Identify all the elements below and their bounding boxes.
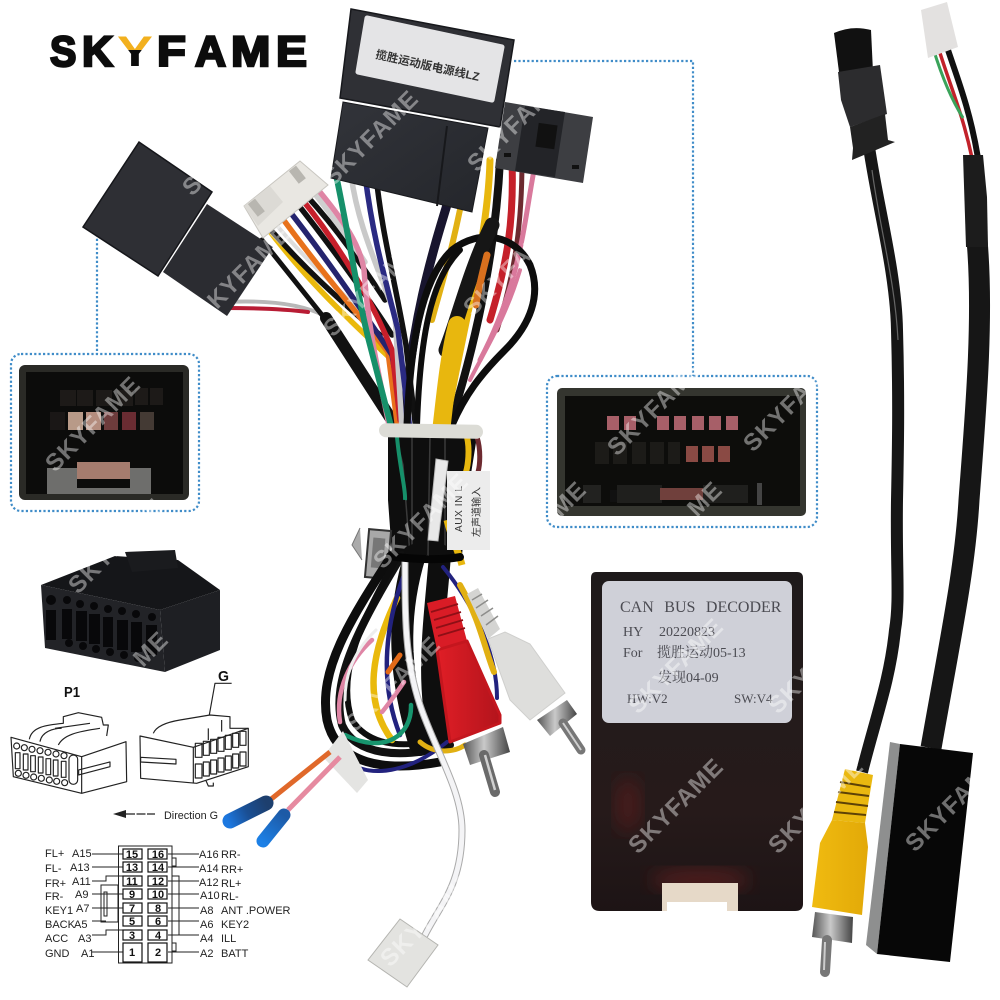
small white terminal [368, 919, 438, 987]
pinout diagram [45, 846, 291, 963]
SKYFAME watermarks: SKYFAME [318, 236, 424, 342]
lower wire loops [325, 555, 465, 771]
pin numbers: 16 [152, 849, 164, 861]
pin labels left: FR+ [45, 878, 66, 890]
pin numbers [126, 849, 165, 959]
pin labels right: ANT .POWER [221, 905, 291, 917]
black inline module [866, 742, 973, 962]
pin labels left: A7 [76, 903, 89, 915]
pin labels right: BATT [221, 948, 249, 960]
heat-shrink tube [428, 459, 448, 541]
pin labels left: A1 [81, 948, 94, 960]
pin labels right [199, 849, 291, 960]
pin numbers: 11 [126, 876, 138, 888]
callout leader: main connector to inset [514, 61, 693, 376]
SKYFAME watermarks: SKYFAME [623, 753, 729, 859]
SKYFAME watermarks: ME [128, 626, 174, 672]
pin labels left [45, 848, 94, 960]
blue tip 2 [263, 815, 284, 841]
pin labels left: A15 [72, 848, 92, 860]
SKYFAME watermarks: SKYFAME [458, 215, 564, 321]
logo: SKYFAME: K [82, 28, 113, 76]
decoder label text: HW:V2 [627, 691, 668, 706]
round plug [834, 28, 873, 72]
pin labels left: FL- [45, 863, 62, 875]
callout leader: left connector to inset [96, 230, 98, 354]
left double connector [83, 142, 273, 316]
pin numbers: 5 [129, 916, 135, 928]
pin labels left: GND [45, 948, 70, 960]
SKYFAME watermarks: SKYFAME [318, 85, 424, 191]
pin numbers: 4 [155, 930, 162, 942]
AUX label tag: 左声道输入 [470, 487, 483, 537]
pin numbers: 15 [126, 849, 138, 861]
pin labels right: A2 [200, 948, 213, 960]
decoder port [662, 883, 738, 912]
SKYFAME watermarks: SKYFAME [368, 468, 474, 574]
SKYFAME watermarks: SKYFAME [602, 355, 708, 461]
pin labels right: KEY2 [221, 919, 249, 931]
decoder label text [620, 599, 782, 706]
SKYFAME watermarks: SKYFAME [177, 95, 283, 201]
pin numbers: 8 [155, 903, 161, 915]
connector label text: 揽胜运动版电源线LZ [374, 47, 481, 84]
pin labels right: A8 [200, 905, 213, 917]
decoder label text: 揽胜运动05-13 [657, 644, 746, 661]
pin numbers: 14 [152, 862, 165, 874]
SKYFAME watermarks: ME [546, 476, 592, 522]
pinout frame [92, 846, 199, 963]
decoder label text: HY [623, 625, 643, 640]
decoder label text: SW:V4 [734, 691, 773, 706]
pin labels left: FR- [45, 891, 64, 903]
logo: SKYFAME: Y [117, 28, 153, 76]
pin labels right: A4 [200, 933, 213, 945]
camera cable: thick with white terminal [921, 2, 988, 748]
decoder label [602, 581, 792, 723]
CAN bus decoder box [591, 572, 803, 912]
pin labels right: A6 [200, 919, 213, 931]
pin labels left: A9 [75, 889, 88, 901]
pin labels left: KEY1 [45, 905, 73, 917]
SKYFAME watermarks: SKYFAME [763, 613, 869, 719]
white two-wire cable with terminal [368, 560, 462, 987]
direction label: Direction G [164, 810, 218, 822]
pin labels left: A3 [78, 933, 91, 945]
cable tie: white [379, 423, 483, 439]
pin numbers: 10 [152, 889, 164, 901]
orange and pink leads with blue tips [230, 731, 368, 841]
right inset photo panel [547, 376, 817, 527]
left inset photo panel [11, 354, 199, 511]
decoder label text: CAN BUS DECODER [620, 599, 782, 616]
SKYFAME watermarks: SKYFAME [40, 371, 146, 477]
pin labels left: A11 [72, 876, 91, 888]
blue tip 1 [230, 803, 266, 821]
black 16-pin connector photo [41, 550, 220, 672]
line drawing: G connector [140, 683, 248, 786]
wiring harness upper wires [262, 160, 535, 430]
decoder label text: 20220823 [659, 625, 715, 640]
pin labels right: RR+ [221, 864, 243, 876]
logo: SKYFAME: M [231, 27, 270, 76]
pin numbers: 12 [152, 876, 164, 888]
metal crimp clip [352, 528, 391, 579]
decoder label text: For [623, 646, 643, 661]
pin labels left: ACC [45, 933, 68, 945]
camera cable: black with plug [834, 28, 898, 772]
pin labels right: ILL [221, 933, 236, 945]
SKYFAME watermarks: SKYFAME [340, 631, 446, 737]
pin labels right: A14 [199, 863, 219, 875]
SKYFAME watermarks: SKYFAME [763, 753, 869, 859]
logo: SKYFAME: E [276, 28, 307, 76]
pin numbers: 1 [129, 947, 135, 959]
pin numbers: 13 [126, 862, 138, 874]
connector paper label [358, 18, 502, 100]
black wire loop upper [407, 225, 535, 440]
pin labels right: RL- [221, 891, 239, 903]
SKYFAME watermarks: SKYFAME [375, 866, 481, 972]
pin labels right: A10 [200, 890, 220, 902]
pin labels right: A12 [199, 877, 219, 889]
connector lower body [331, 102, 488, 212]
pin numbers: 3 [129, 930, 135, 942]
pin labels right: RL+ [221, 878, 242, 890]
pin numbers: 6 [155, 916, 161, 928]
pin numbers: 2 [155, 947, 161, 959]
RCA plug: yellow [812, 769, 873, 972]
SKYFAME watermarks: SKYFAME [63, 493, 169, 599]
pin labels left: BACK [45, 919, 76, 931]
AUX label tag: AUX IN L [454, 486, 465, 532]
small right connector [495, 102, 593, 183]
SKYFAME watermarks: ME [682, 476, 728, 522]
RCA plug: white [443, 567, 581, 750]
AUX label tag [447, 471, 490, 550]
direction arrow [113, 810, 155, 818]
pin numbers: 9 [129, 889, 135, 901]
SKYFAME watermarks: SKYFAME [623, 613, 729, 719]
decoder label text: 发现04-09 [658, 670, 719, 686]
pin numbers: 7 [129, 903, 135, 915]
logo: SKYFAME: F [157, 27, 186, 76]
logo: SKYFAME: A [195, 28, 226, 76]
logo: SKYFAME: S [50, 27, 76, 75]
side wires of left connector [225, 240, 395, 425]
label: G: G [218, 668, 229, 685]
pin labels left: FL+ [45, 848, 64, 860]
label: P1: P1 [64, 684, 80, 701]
pin labels left: A5 [74, 919, 87, 931]
pin cells [123, 849, 167, 962]
connector cap [340, 9, 514, 127]
SKYFAME watermarks: SKYFAME [462, 71, 568, 177]
cable tie: black [390, 556, 460, 559]
SKYFAME watermarks: SKYFAME [190, 220, 296, 326]
pin labels right: A16 [199, 849, 219, 861]
SKYFAME watermarks: SKYFAME [738, 351, 844, 457]
logo: SKYFAME [50, 27, 307, 76]
line drawing: P1 connector [11, 713, 127, 793]
white terminal connector [244, 161, 328, 238]
pin labels right: RR- [221, 849, 241, 861]
RCA plug: red [427, 596, 510, 792]
harness central bundle [388, 430, 480, 565]
main power connector [331, 9, 514, 212]
pin labels left: A13 [70, 862, 90, 874]
